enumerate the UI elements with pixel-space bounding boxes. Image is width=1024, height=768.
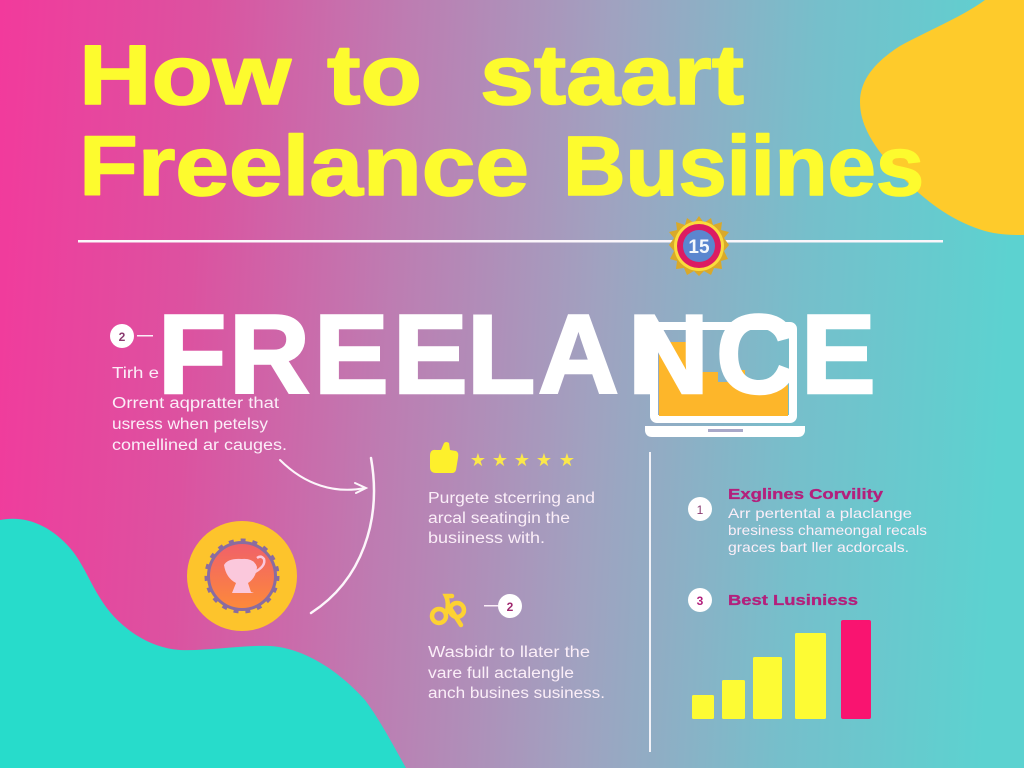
left paragraph: Orrent aqpratter that [112, 395, 280, 412]
left paragraph: comellined ar cauges. [112, 437, 287, 454]
step 3 right [688, 588, 858, 612]
long curve [311, 458, 374, 613]
stars rating [470, 450, 575, 470]
FREELANCE heading: FREELANCE [158, 292, 876, 417]
stars rating: ★ [559, 450, 575, 470]
badge: 15: 15 [688, 237, 710, 258]
step 2 left [110, 324, 287, 454]
badge: 15 [669, 216, 729, 276]
title: staart [480, 28, 744, 122]
title: Freelance [79, 119, 529, 213]
stars rating: ★ [470, 450, 486, 470]
laptop icon [645, 326, 805, 437]
step 3 right: 3 [697, 594, 704, 608]
title: to [327, 28, 422, 122]
laptop chart [659, 342, 788, 416]
step 2 middle: 2 [507, 600, 514, 614]
middle text block 1: busiiness with. [428, 530, 545, 547]
step 2 left: Tirh e [112, 365, 159, 382]
curved arrow [280, 460, 366, 493]
title: Busiines [563, 119, 924, 213]
middle text block 2: anch busines susiness. [428, 685, 605, 702]
step 1 right [688, 486, 927, 555]
left paragraph [112, 395, 287, 454]
trophy medallion icon [187, 521, 297, 631]
right paragraph [728, 505, 927, 555]
laptop base [645, 426, 805, 437]
teal blob bottom left [0, 519, 406, 768]
divider line [78, 240, 943, 242]
squiggle icon [432, 596, 464, 625]
middle text block 2: Wasbidr to llater the [428, 644, 590, 661]
step 2 middle [484, 594, 522, 618]
stars rating: ★ [492, 450, 508, 470]
title [79, 28, 924, 213]
vertical divider [649, 452, 651, 752]
thumbs up icon [430, 442, 458, 473]
middle text block 1 [428, 490, 595, 547]
bar chart [692, 620, 871, 719]
middle text block 2: vare full actalengle [428, 665, 574, 682]
step 1 right: 1 [697, 503, 704, 517]
title: How [79, 28, 292, 122]
yellow blob top right [860, 0, 1024, 235]
right paragraph: graces bart ller acdorcals. [728, 539, 909, 555]
heading: Best Lusiniess: Best Lusiniess [728, 592, 858, 609]
left paragraph: usress when petelsy [112, 416, 268, 433]
heading: Exglines Corvility: Exglines Corvility [728, 486, 884, 503]
stars rating: ★ [536, 450, 552, 470]
middle text block 1: Purgete stcerring and [428, 490, 595, 507]
right paragraph: bresiness chameongal recals [728, 522, 927, 538]
stars rating: ★ [514, 450, 530, 470]
middle text block 1: arcal seatingin the [428, 510, 570, 527]
right paragraph: Arr pertental a placlange [728, 505, 912, 521]
middle text block 2 [428, 644, 605, 702]
step 2 left: 2 [119, 330, 126, 344]
